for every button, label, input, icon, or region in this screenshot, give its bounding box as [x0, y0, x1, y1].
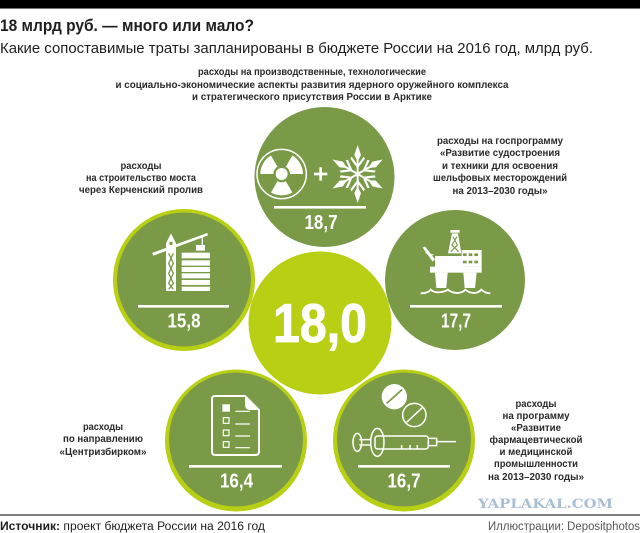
icon: pills and syringe [353, 384, 456, 456]
panel: bottom-left circle, election commission 16,4: 16,4 [220, 470, 254, 492]
icon: checklist document [212, 396, 259, 455]
label: pharmaceutical programme: «Развитие [511, 423, 562, 434]
label: nuclear and Arctic spending: и стратегического присутствия России в Арктике [192, 92, 433, 103]
label: Central Election Commission: «Центризбирком» [60, 447, 147, 458]
divider and value [138, 305, 229, 308]
icon: oil platform [421, 230, 490, 293]
panel: top circle, nuclear and Arctic 18,7: 18,7 [304, 212, 338, 234]
label: shipbuilding programme: шельфовых месторождений [433, 173, 567, 184]
label: shipbuilding programme: «Развитие судостроения [440, 148, 560, 159]
panel: left circle, bridge 15,8: 15,8 [168, 310, 200, 332]
label: nuclear and Arctic spending [116, 67, 509, 103]
divider and value [358, 465, 450, 468]
divider and value [274, 206, 366, 209]
label: nuclear and Arctic spending: расходы на производственные, технологические [198, 67, 427, 78]
label: pharmaceutical programme [488, 399, 585, 483]
panel: right circle, oil platform 17,7: 17,7 [441, 310, 471, 332]
icon: radiation sign, plus, snowflake [257, 145, 386, 203]
panel: centre circle 18,0 [248, 252, 392, 394]
label: Central Election Commission: расходы [83, 422, 123, 433]
label: pharmaceutical programme: расходы [516, 399, 556, 410]
panel: left circle, bridge 15,8 [113, 209, 255, 351]
label: Kerch bridge spending: через Керченский пролив [79, 185, 203, 196]
central value: 18,0 [273, 292, 367, 354]
label: shipbuilding programme: и техники для освоения [442, 161, 558, 172]
illustration credit: Иллюстрации: Depositphotos [488, 521, 640, 533]
label: pharmaceutical programme: фармацевтической [490, 435, 582, 446]
label: pharmaceutical programme: на 2013–2030 годы» [488, 472, 585, 483]
panel: bottom-left circle, election commission 16,4 [165, 370, 307, 512]
label: pharmaceutical programme: на программу [502, 411, 570, 422]
label: Kerch bridge spending [79, 161, 203, 196]
label: Central Election Commission: по направлению [63, 434, 143, 445]
top black bar [0, 0, 640, 9]
label: pharmaceutical programme: промышленности [494, 459, 578, 470]
panel: bottom-right circle, pharma 16,7: 16,7 [388, 470, 420, 492]
divider and value [410, 305, 502, 308]
divider and value [189, 465, 282, 468]
label: Kerch bridge spending: на строительство моста [86, 173, 197, 184]
footer rule [0, 514, 640, 516]
panel: bottom-right circle, pharma 16,7 [333, 370, 475, 512]
title: 18 млрд руб. — много или мало? [0, 16, 254, 35]
source line: Источник: проект бюджета России на 2016 год [0, 521, 265, 533]
label: shipbuilding programme [433, 136, 567, 197]
label: shipbuilding programme: на 2013–2030 годы» [452, 186, 548, 197]
label: shipbuilding programme: расходы на госпрограмму [437, 136, 564, 147]
label: nuclear and Arctic spending: и социально-экономические аспекты развития ядерного оружейного комплекса [116, 80, 509, 91]
panel: right circle, oil platform 17,7 [385, 210, 525, 350]
panel: top circle, nuclear and Arctic 18,7 [254, 107, 394, 247]
watermark: YAPLAKAL.COM [477, 497, 613, 512]
label: Kerch bridge spending: расходы [120, 161, 162, 172]
label: pharmaceutical programme: и медицинской [500, 447, 572, 458]
label: Central Election Commission [60, 422, 147, 458]
subtitle: Какие сопоставимые траты запланированы в бюджете России на 2016 год, млрд руб. [0, 41, 593, 57]
icon: construction crane and building [152, 233, 210, 291]
